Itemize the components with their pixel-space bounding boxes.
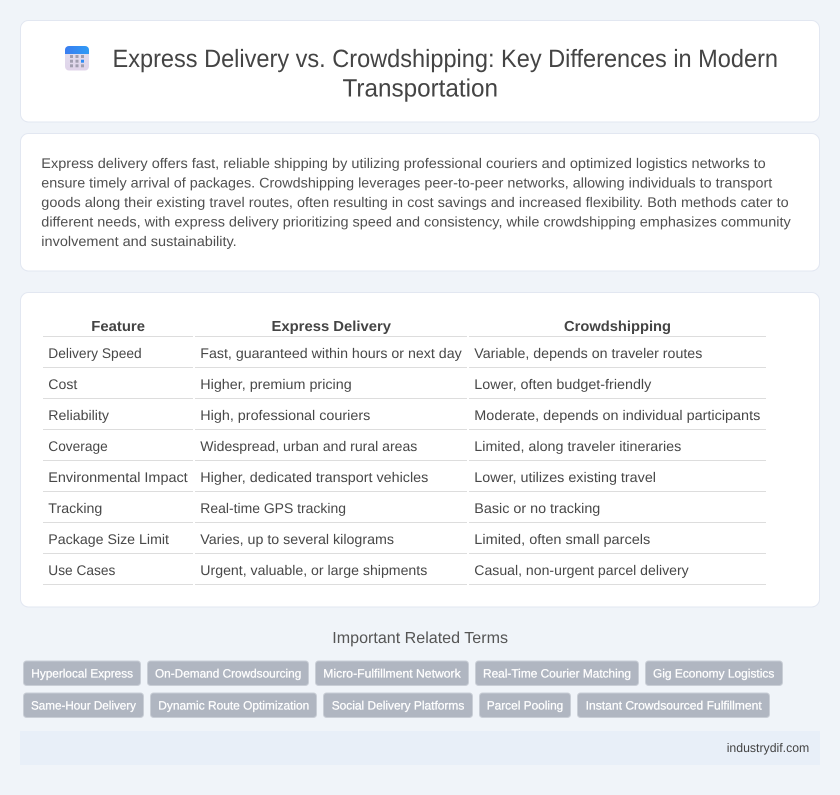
row: tracking: Real-time GPS tracking: [200, 500, 346, 516]
tag: social delivery platforms: Social Delivery Platforms: [332, 698, 464, 712]
row: cost: Lower, often budget-friendly: [474, 376, 651, 392]
row: use cases: [48, 562, 689, 578]
row: delivery speed: Fast, guaranteed within hours or next day: [200, 345, 462, 361]
panel: comparison table: [20, 292, 820, 607]
row: coverage: Limited, along traveler itineraries: [474, 438, 681, 454]
footer: industrydif.com: [727, 741, 809, 755]
row: delivery speed: [48, 345, 702, 361]
row: coverage: Widespread, urban and rural areas: [200, 438, 417, 454]
tag: instant crowdsourced fulfillment: [578, 693, 770, 718]
row: reliability: High, professional couriers: [200, 407, 370, 423]
row: environmental impact: Environmental Impact: [48, 469, 188, 485]
row: package size limit: Package Size Limit: [48, 531, 169, 547]
row: package size limit: [48, 531, 650, 547]
row: cost: [48, 376, 651, 392]
footer: [20, 731, 820, 765]
tag: instant crowdsourced fulfillment: Instant Crowdsourced Fulfillment: [586, 698, 762, 712]
tag: dynamic route optimization: [150, 693, 316, 718]
heading: important related terms: Important Related Terms: [332, 630, 508, 647]
table header: Express Delivery: [272, 319, 391, 335]
table header: [91, 319, 671, 335]
tag: on-demand crowdsourcing: On-Demand Crowdsourcing: [155, 666, 301, 680]
row: tracking: Tracking: [48, 500, 102, 516]
tag: gig economy logistics: [646, 661, 782, 686]
panel: header: [20, 20, 820, 122]
intro paragraph: ensure timely arrival of packages. Crowdshipping leverages peer-to-peer networks, allowing individuals to transport: [41, 174, 772, 190]
row: cost: Higher, premium pricing: [200, 376, 352, 392]
row: tracking: Basic or no tracking: [474, 500, 600, 516]
row: reliability: Reliability: [48, 407, 109, 423]
row: reliability: [48, 407, 760, 423]
row: use cases: Use Cases: [48, 562, 115, 578]
panel: introduction: [20, 134, 820, 271]
row: coverage: Coverage: [48, 438, 108, 454]
tag: hyperlocal express: [24, 661, 140, 686]
tag: hyperlocal express: Hyperlocal Express: [31, 666, 133, 680]
tag: real-time courier matching: Real-Time Courier Matching: [483, 666, 631, 680]
tag: micro-fulfillment network: Micro-Fulfillment Network: [323, 666, 462, 680]
row: environmental impact: [48, 469, 656, 485]
tag: real-time courier matching: [476, 661, 638, 686]
title: Express Delivery vs. Crowdshipping: Key Differences in Modern: [112, 45, 778, 73]
tag: same-hour delivery: Same-Hour Delivery: [31, 698, 136, 712]
intro paragraph: involvement and sustainability.: [41, 233, 237, 249]
tag: gig economy logistics: Gig Economy Logistics: [653, 666, 774, 680]
tag: micro-fulfillment network: [316, 661, 468, 686]
related term tags: [24, 661, 782, 718]
intro paragraph: Express delivery offers fast, reliable shipping by utilizing professional couriers and optimized logistics networks to: [41, 155, 766, 171]
table header: Feature: [91, 319, 145, 335]
intro paragraph: different needs, with express delivery prioritizing speed and consistency, while crowdshipping emphasizes community: [41, 214, 791, 230]
row: tracking: [48, 500, 600, 516]
title: [112, 45, 778, 102]
tag: on-demand crowdsourcing: [148, 661, 308, 686]
row: use cases: Urgent, valuable, or large shipments: [200, 562, 427, 578]
tag: parcel pooling: [480, 693, 570, 718]
tag: dynamic route optimization: Dynamic Route Optimization: [158, 698, 309, 712]
row: use cases: Casual, non-urgent parcel delivery: [474, 562, 689, 578]
row: coverage: [48, 438, 681, 454]
row: delivery speed: Variable, depends on traveler routes: [474, 345, 702, 361]
tag: parcel pooling: Parcel Pooling: [487, 698, 563, 712]
tag: same-hour delivery: [24, 693, 144, 718]
intro paragraph: goods along their existing travel routes, often resulting in cost savings and increased flexibility. Both methods cater to: [41, 194, 789, 210]
title: Transportation: [342, 74, 498, 102]
row: package size limit: Varies, up to several kilograms: [200, 531, 394, 547]
intro paragraph: [41, 155, 791, 249]
row: cost: Cost: [48, 376, 77, 392]
icon: calendar: [65, 46, 89, 70]
row: package size limit: Limited, often small parcels: [474, 531, 650, 547]
row: environmental impact: Lower, utilizes existing travel: [474, 469, 656, 485]
row: delivery speed: Delivery Speed: [48, 345, 142, 361]
table header: Crowdshipping: [564, 319, 671, 335]
tag: social delivery platforms: [324, 693, 472, 718]
row: environmental impact: Higher, dedicated transport vehicles: [200, 469, 428, 485]
row: reliability: Moderate, depends on individual participants: [474, 407, 760, 423]
